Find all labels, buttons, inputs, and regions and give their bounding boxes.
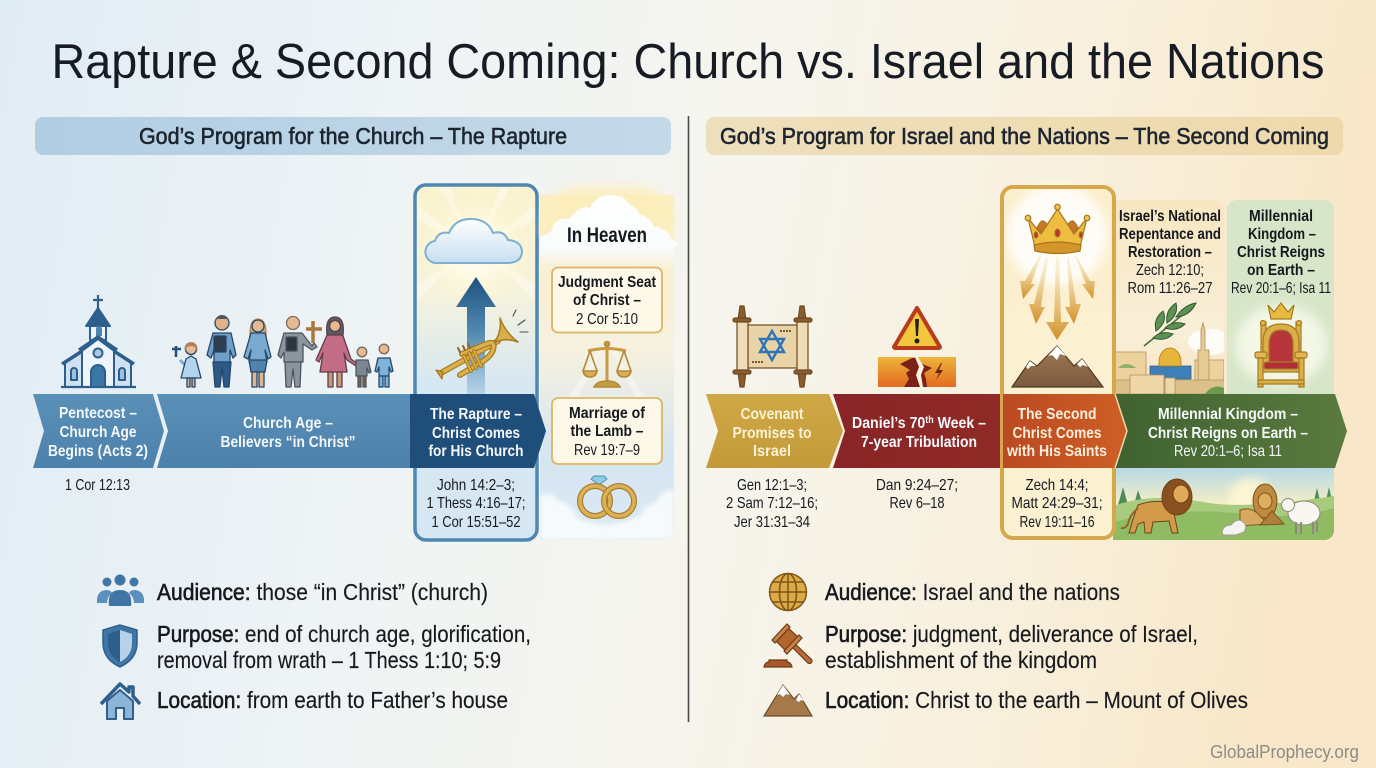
icon: cloud — [425, 219, 522, 263]
icon: Jerusalem skyline — [1115, 323, 1232, 394]
arrow: covenant promises: Promises to — [732, 425, 812, 442]
references: second coming: Rev 19:11–16 — [1020, 514, 1095, 531]
icon: lamb lying — [1222, 520, 1246, 535]
references: rapture — [426, 477, 526, 531]
icon: standing lamb — [1282, 498, 1320, 534]
arrow: Daniel's 70th week: 7-year Tribulation — [861, 434, 977, 451]
icon: family of believers — [172, 315, 393, 387]
icon: olive branch — [1144, 303, 1196, 346]
icon: shield — [103, 625, 137, 667]
watermark: GlobalProphecy.org — [1210, 742, 1359, 762]
callout: marriage of the lamb: Rev 19:7–9 — [574, 442, 640, 459]
heading: church program — [35, 117, 671, 155]
timeline: Israel and the nations — [706, 394, 1347, 468]
icon: man with book — [207, 315, 236, 387]
text: purpose — [157, 621, 531, 673]
references: rapture: John 14:2–3; — [437, 477, 515, 494]
panel: rapture highlight — [415, 185, 537, 540]
references: covenant — [726, 477, 818, 531]
arrow: The Rapture: The Rapture – — [430, 406, 522, 423]
text: purpose: establishment of the kingdom — [825, 647, 1097, 673]
panel: second coming — [1002, 185, 1114, 538]
legend: Israel and the nations — [764, 574, 1248, 716]
references: tribulation — [876, 477, 958, 512]
sun rays — [417, 188, 535, 300]
arrow: Church Age: Church Age – — [243, 415, 333, 432]
arrow: Daniel's 70th week: th — [925, 415, 934, 426]
text: location: Location: from earth to Father’s house — [157, 687, 508, 713]
icon: Torah scroll — [733, 306, 812, 387]
icon: child with cross — [172, 342, 201, 387]
icon: woman in pink — [316, 317, 358, 387]
timeline: church age — [33, 394, 546, 468]
callout: judgment seat — [552, 268, 662, 332]
icon: man with cross — [278, 316, 322, 387]
icon: mountains — [764, 685, 812, 716]
arrow: millennial kingdom — [1115, 394, 1347, 468]
references: second coming: Matt 24:29–31; — [1012, 495, 1102, 512]
icon: gavel — [764, 624, 812, 667]
arrow: Church Age — [157, 394, 416, 468]
icon: throne and crown — [1255, 303, 1307, 387]
arrow: millennial kingdom: Christ Reigns on Earth – — [1148, 425, 1308, 442]
arrow: second coming: Christ Comes — [1012, 425, 1102, 442]
panel: millennial kingdom detail: Rev 20:1–6; Isa 11 — [1231, 280, 1331, 297]
heading: in heaven: In Heaven — [567, 224, 647, 247]
arrow: millennial kingdom: Rev 20:1–6; Isa 11 — [1174, 443, 1282, 460]
icon: trumpet — [436, 310, 528, 379]
panel: Israel's repentance — [1115, 200, 1232, 394]
reference: 1 Cor 12:13: 1 Cor 12:13 — [65, 477, 130, 494]
cloud footer — [540, 489, 674, 540]
icon: church — [61, 295, 136, 387]
callout: marriage of the lamb: the Lamb – — [570, 423, 644, 440]
icon: house — [101, 684, 140, 719]
text: audience: Audience: those “in Christ” (church) — [157, 579, 488, 605]
icon: small boy — [356, 347, 371, 387]
panel: millennial kingdom detail: Kingdom – — [1248, 226, 1316, 243]
references: covenant: 2 Sam 7:12–16; — [726, 495, 818, 512]
icon: globe — [770, 574, 806, 610]
arrow: Church Age: Believers “in Christ” — [220, 434, 356, 451]
heading: Israel program: God’s Program for Israel and the Nations – The Second Coming — [720, 123, 1329, 149]
arrow: Pentecost: Pentecost – — [59, 405, 137, 422]
references: second coming — [1012, 477, 1102, 531]
icon: resting lion — [1240, 484, 1284, 526]
arrow: Daniel's 70th week: Week – — [934, 415, 986, 432]
callout: judgment seat: Judgment Seat — [558, 274, 657, 291]
arrow: second coming: with His Saints — [1006, 443, 1107, 460]
text: purpose: Purpose: judgment, deliverance of Israel, — [825, 621, 1198, 647]
icon: woman in blue — [244, 319, 271, 387]
arrow: The Rapture: Christ Comes — [432, 425, 520, 442]
references: second coming: Zech 14:4; — [1026, 477, 1088, 494]
arrow: second coming — [1003, 394, 1127, 468]
arrow: Pentecost: Begins (Acts 2) — [48, 443, 148, 460]
text: audience: Audience: Israel and the nations — [825, 579, 1120, 605]
arrow: Pentecost: Church Age — [60, 424, 137, 441]
panel: millennial kingdom detail — [1227, 200, 1334, 394]
heading: church program: God’s Program for the Church – The Rapture — [139, 123, 567, 149]
references: rapture: 1 Thess 4:16–17; — [426, 495, 526, 512]
arrow: The Rapture — [410, 394, 546, 468]
references: rapture: 1 Cor 15:51–52 — [432, 514, 521, 531]
heading: Israel program — [706, 117, 1343, 155]
center divider — [688, 116, 690, 722]
icon: crown — [1025, 204, 1090, 254]
icon: up arrow — [456, 277, 496, 394]
icon: wedding rings — [580, 476, 634, 516]
references: tribulation: Dan 9:24–27; — [876, 477, 958, 494]
text: location: Location: Christ to the earth – Mount of Olives — [825, 687, 1248, 713]
panel: Israel's repentance: Zech 12:10; — [1136, 262, 1204, 279]
title: Rapture & Second Coming: Church vs. Israel and the Nations — [52, 35, 1324, 89]
callout: judgment seat: 2 Cor 5:10 — [576, 311, 638, 328]
icon: warning and earthquake — [878, 308, 956, 387]
references: covenant: Gen 12:1–3; — [737, 477, 807, 494]
arrow: millennial kingdom: Millennial Kingdom – — [1158, 406, 1298, 423]
panel: in heaven — [540, 185, 678, 540]
arrow: covenant promises: Covenant — [740, 406, 804, 423]
panel: Israel's repentance: Repentance and — [1119, 226, 1221, 243]
icon: audience group — [97, 574, 144, 606]
icon: mountain — [1012, 346, 1103, 387]
references: tribulation: Rev 6–18 — [890, 495, 945, 512]
panel border: second coming — [1002, 187, 1114, 538]
icon: scales — [583, 342, 631, 387]
icon: small child in blue — [375, 344, 393, 387]
icon: lion — [1121, 479, 1192, 533]
callout: marriage of the lamb: Marriage of — [569, 405, 646, 422]
arrow: The Rapture: for His Church — [428, 443, 524, 460]
callout: judgment seat: of Christ – — [573, 292, 641, 309]
heaven cloud — [540, 195, 678, 275]
callout: marriage of the lamb — [552, 398, 662, 464]
arrow: covenant promises: Israel — [753, 443, 791, 460]
illustration: lion and lamb scene — [1113, 468, 1334, 540]
arrow: covenant promises — [706, 394, 843, 468]
references: covenant: Jer 31:31–34 — [734, 514, 810, 531]
arrow: Daniel's 70th week: Daniel’s 70 — [852, 415, 935, 432]
icon: descending rays — [1020, 255, 1095, 340]
text: purpose: removal from wrath – 1 Thess 1:10; 5:9 — [157, 647, 501, 673]
panel: millennial kingdom detail: on Earth – — [1247, 262, 1315, 279]
legend: church — [97, 574, 531, 719]
panel: Israel's repentance: Israel’s National — [1119, 208, 1221, 225]
panel: millennial kingdom detail: Christ Reigns — [1237, 244, 1325, 261]
text: purpose — [825, 621, 1198, 673]
panel: millennial kingdom detail: Millennial — [1249, 208, 1313, 225]
text: purpose: Purpose: end of church age, glorification, — [157, 621, 531, 647]
panel: Israel's repentance: Rom 11:26–27 — [1128, 280, 1213, 297]
arrow: Pentecost — [33, 394, 164, 468]
arrow: Daniel's 70th week — [833, 394, 1000, 468]
arrow: second coming: The Second — [1018, 406, 1096, 423]
panel: Israel's repentance: Restoration – — [1128, 244, 1212, 261]
